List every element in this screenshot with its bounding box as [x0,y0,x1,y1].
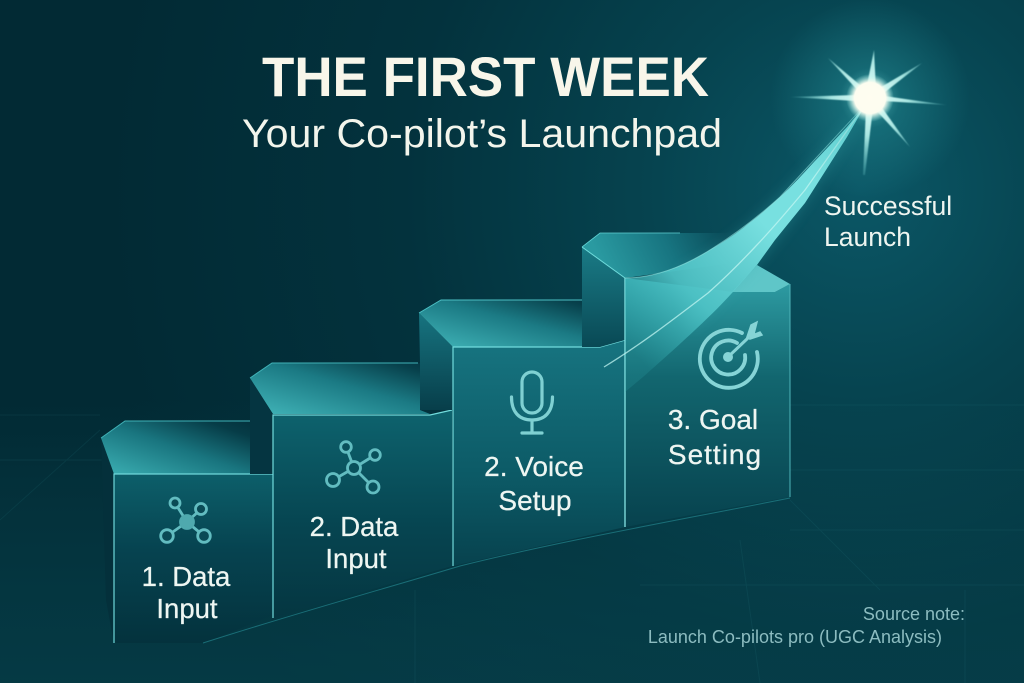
glowing star burst [770,0,970,198]
launch trail ribbon [604,104,866,392]
label: 1. Data Input: Input [156,593,218,624]
icon: network nodes [161,498,210,542]
subtitle: Your Co-pilot’s Launchpad [242,112,722,156]
label: Successful Launch: Launch [824,222,911,252]
label: 2. Voice Setup: Setup [498,485,572,516]
icon: network nodes [326,442,380,493]
step 3 block [419,300,625,566]
label: 3. Goal Setting: 3. Goal [668,404,758,435]
step 1 block [101,421,273,643]
icon: target with arrow [700,322,762,388]
title: THE FIRST WEEK [262,45,709,108]
step 2 block [250,363,452,618]
label: 1. Data Input: 1. Data [142,561,231,592]
label: 2. Voice Setup: 2. Voice [484,451,584,482]
icon: microphone [512,372,552,433]
source note: Launch Co-pilots pro (UGC Analysis) [648,627,942,647]
label: 3. Goal Setting: Setting [668,439,762,470]
base edge line [203,498,790,643]
label: 2. Data Input: 2. Data [310,511,399,542]
step 4 block [582,232,790,527]
source note: Source note: [863,604,965,624]
label: Successful Launch: Successful [824,191,952,221]
label: 2. Data Input: Input [325,543,387,574]
